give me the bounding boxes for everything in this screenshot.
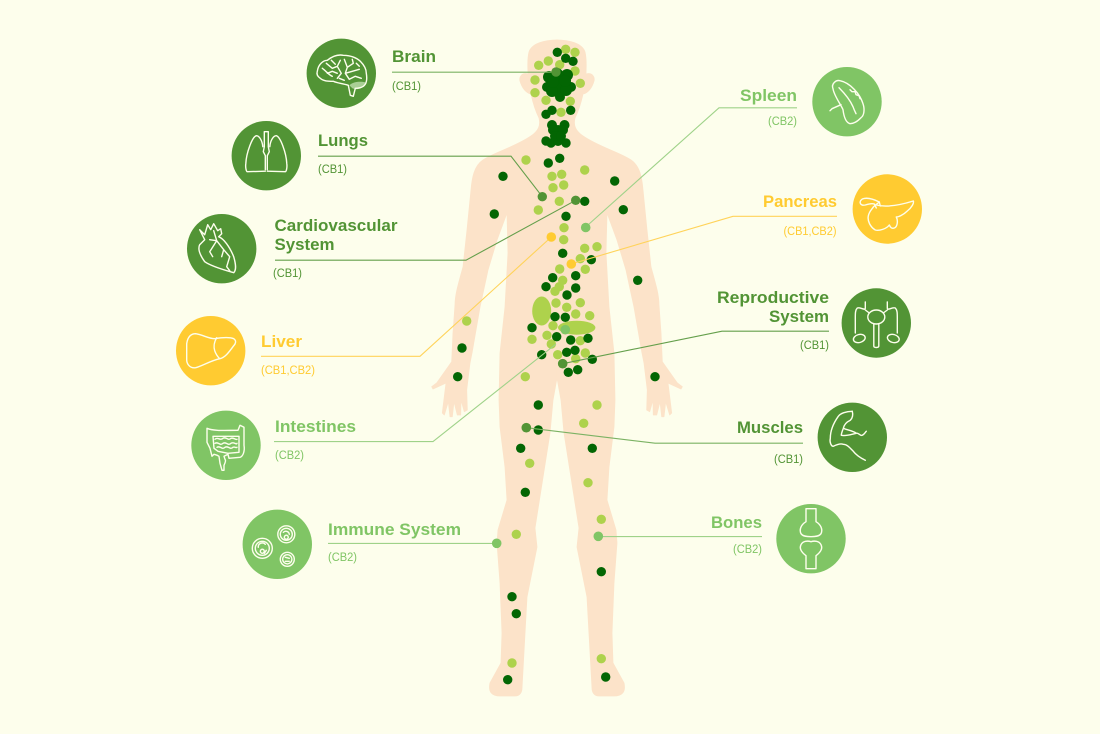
- heading: Spleen: Spleen: [740, 86, 797, 105]
- panel: Liver: [176, 232, 556, 385]
- receptor marker: Intestines: [560, 325, 570, 335]
- leader line: Bones: [598, 536, 762, 538]
- light green receptor dots (CB2): [462, 45, 606, 668]
- leader line: Muscles: [526, 428, 803, 443]
- receptor type: Intestines: (CB2): [275, 450, 304, 462]
- panel: Cardiovascular System: [187, 196, 580, 283]
- receptor marker: Liver: [546, 232, 556, 242]
- leader line: Brain: [392, 71, 556, 73]
- leader line: Spleen: [586, 108, 797, 227]
- leader line: Immune System: [328, 542, 497, 544]
- icon: heart: [187, 214, 256, 283]
- icon: joint bones: [776, 504, 846, 573]
- icon: intestines: [191, 411, 261, 480]
- heading: Liver: Liver: [261, 332, 302, 351]
- icon: reproductive organs: [842, 288, 911, 358]
- icon: immune cells: [243, 510, 312, 579]
- receptor type: Bones: (CB2): [733, 544, 762, 556]
- panel: Muscles: [522, 403, 887, 472]
- panel: Reproductive System: [558, 288, 911, 369]
- dark green receptor dots (CB1): [453, 48, 660, 684]
- receptor type: Muscles: (CB1): [774, 454, 803, 466]
- panel: Spleen: [581, 67, 882, 232]
- receptor marker: Reproductive System: [558, 359, 568, 369]
- receptor type: Lungs: (CB1): [318, 164, 347, 176]
- receptor marker: Pancreas: [566, 259, 576, 269]
- receptor type: Reproductive System: (CB1): [800, 340, 829, 352]
- receptor marker: Muscles: [522, 423, 531, 433]
- receptor type: Pancreas: (CB1,CB2): [784, 226, 837, 238]
- heading: Reproductive System: System: [769, 307, 829, 326]
- leader line: Liver: [261, 237, 551, 356]
- heading: Brain: Brain: [392, 47, 436, 66]
- panel: Pancreas: [566, 174, 922, 269]
- panel: Immune System: [243, 510, 502, 579]
- receptor marker: Cardiovascular System: [571, 196, 580, 205]
- receptor marker: Spleen: [581, 223, 590, 232]
- leader line: Reproductive System: [563, 331, 829, 364]
- leader line: Intestines: [274, 344, 556, 442]
- heading: Reproductive System: Reproductive: [717, 288, 829, 307]
- receptor type: Spleen: (CB2): [768, 116, 797, 128]
- leader line: Pancreas: [571, 216, 837, 264]
- panel: Bones: [594, 504, 846, 573]
- heading: Bones: Bones: [711, 513, 762, 532]
- heading: Intestines: Intestines: [275, 417, 356, 436]
- receptor type: Cardiovascular System: (CB1): [273, 268, 302, 280]
- panel: Lungs: [232, 121, 547, 201]
- receptor type: Brain: (CB1): [392, 81, 421, 93]
- receptor marker: Brain: [551, 67, 561, 77]
- heading: Muscles: Muscles: [737, 418, 803, 437]
- panel: Brain: [307, 39, 561, 108]
- heading: Immune System: Immune System: [328, 520, 461, 539]
- icon: brain: [307, 39, 376, 108]
- icon: spleen: [812, 67, 882, 136]
- leader line: Lungs: [318, 156, 542, 197]
- panel: Intestines: [191, 325, 570, 480]
- leader line: Cardiovascular System: [275, 200, 576, 260]
- icon: lungs: [232, 121, 301, 190]
- heading: Lungs: Lungs: [318, 131, 368, 150]
- heading: Pancreas: Pancreas: [763, 192, 837, 211]
- receptor type: Liver: (CB1,CB2): [261, 365, 315, 377]
- human body silhouette: [432, 40, 682, 696]
- icon: flexed arm muscle: [818, 403, 887, 472]
- receptor marker: Bones: [594, 532, 603, 541]
- receptor marker: Lungs: [538, 192, 547, 201]
- receptor type: Immune System: (CB2): [328, 552, 357, 564]
- icon: liver: [176, 316, 245, 385]
- heading: Cardiovascular System: Cardiovascular: [274, 216, 398, 235]
- receptor marker: Immune System: [492, 538, 502, 548]
- icon: pancreas: [853, 174, 922, 244]
- heading: Cardiovascular System: System: [274, 235, 334, 254]
- organ shapes: liver and intestine ellipses: [532, 296, 595, 335]
